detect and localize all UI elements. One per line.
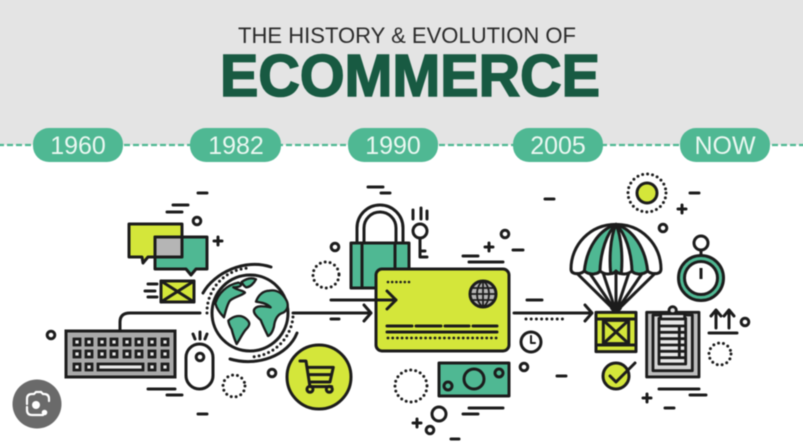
icon: clipboard xyxy=(647,307,699,377)
icon: credit card xyxy=(331,269,509,351)
icon: keyboard xyxy=(66,331,175,377)
icon: sun xyxy=(628,174,666,212)
timeline pills: 2005 xyxy=(530,132,586,160)
icon: clock xyxy=(521,332,541,352)
icon: mouse xyxy=(186,332,213,389)
icon: this-way-up arrows xyxy=(709,310,737,333)
icon: check mark badge xyxy=(603,363,635,389)
title: THE HISTORY & EVOLUTION OF xyxy=(238,23,576,48)
icon: banknote xyxy=(439,363,509,396)
icon: chat bubbles xyxy=(129,224,207,275)
icon: key xyxy=(413,208,427,257)
icon: padlock xyxy=(351,205,409,288)
timeline pills: NOW xyxy=(694,132,756,160)
icon: stopwatch xyxy=(678,236,724,300)
timeline pills xyxy=(33,128,770,162)
connector lines and arrows xyxy=(120,305,592,331)
icon: image search button xyxy=(12,380,62,428)
icon: crate xyxy=(596,312,636,352)
decorative dashes, plus signs and small circles xyxy=(47,187,749,439)
timeline pills: 1982 xyxy=(208,132,264,160)
title: ECOMMERCE xyxy=(220,43,600,109)
timeline pills: 1960 xyxy=(50,132,106,160)
icon: globe xyxy=(203,264,297,362)
icon: parachute xyxy=(571,224,661,314)
icon: shopping cart badge xyxy=(287,345,351,409)
icon: envelope xyxy=(145,281,194,302)
timeline pills: 1990 xyxy=(365,132,421,160)
